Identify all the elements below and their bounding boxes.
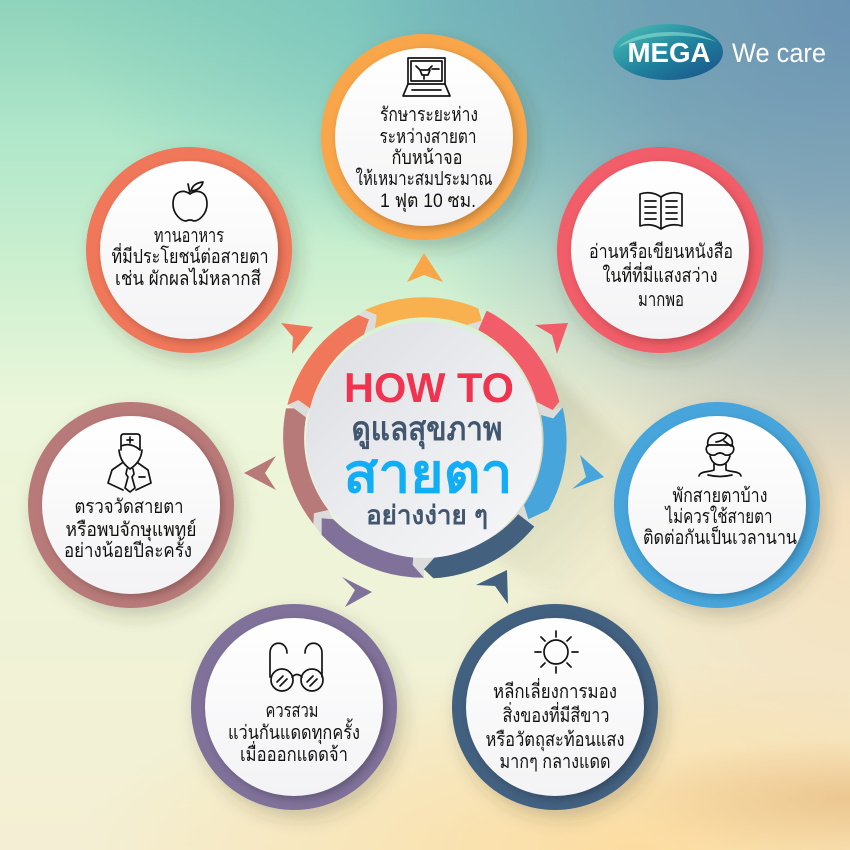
panel: reading light: มากพอ bbox=[638, 289, 684, 311]
central ring and title bbox=[283, 297, 567, 578]
panel: reading light bbox=[557, 147, 763, 353]
icon: glasses bbox=[270, 643, 323, 691]
icon: person with goggles bbox=[699, 433, 741, 476]
long shadow of central ring bbox=[490, 355, 630, 610]
panel: avoid glare: สิ่งของที่มีสีขาว bbox=[502, 702, 610, 727]
arrow: left bbox=[244, 456, 276, 490]
panel: screen distance: ให้เหมาะสมประมาณ bbox=[356, 167, 492, 190]
logo: MEGA We care bbox=[613, 24, 826, 80]
arrow: bottom right bbox=[476, 570, 508, 604]
panel: screen distance bbox=[321, 34, 527, 240]
arrow: bottom left bbox=[342, 577, 372, 607]
panel: screen distance: รักษาระยะห่าง bbox=[380, 104, 478, 126]
panel: rest eyes: ไม่ควรใช้สายตา bbox=[664, 505, 772, 528]
logo: MEGA We care: MEGA bbox=[628, 37, 710, 68]
panel: eye exam bbox=[28, 402, 234, 608]
logo: MEGA We care: We care bbox=[732, 38, 826, 68]
panel: reading light: ในที่ที่มีแสงสว่าง bbox=[602, 262, 718, 287]
panel: eye exam: ตรวจวัดสายตา bbox=[74, 496, 184, 518]
title text bbox=[344, 364, 514, 530]
central white disc bbox=[306, 322, 542, 558]
title text: ดูแลสุขภาพ bbox=[352, 410, 502, 450]
arrow: right bbox=[572, 455, 604, 489]
panel: rest eyes: ติดต่อกันเป็นเวลานาน bbox=[643, 525, 797, 549]
icon: sun bbox=[535, 631, 578, 673]
panel: healthy food: ที่มีประโยชน์ต่อสายตา bbox=[112, 243, 268, 268]
icon: apple bbox=[173, 182, 207, 221]
panel: screen distance: กับหน้าจอ bbox=[392, 147, 462, 169]
icon: open book bbox=[640, 193, 682, 229]
title text: HOW TO bbox=[344, 364, 514, 411]
arrow: top left bbox=[281, 323, 313, 354]
panel: avoid glare bbox=[452, 604, 658, 810]
panel: avoid glare: มากๆ กลางแดด bbox=[500, 751, 610, 773]
panel: screen distance: ระหว่างสายตา bbox=[380, 126, 476, 148]
panel: screen distance: 1 ฟุต 10 ซม. bbox=[380, 190, 476, 213]
panel: reading light: อ่านหรือเขียนหนังสือ bbox=[589, 241, 733, 263]
ring of arrow segments bbox=[283, 297, 567, 578]
panel: healthy food: เช่น ผักผลไม้หลากสี bbox=[115, 267, 261, 290]
arrow: top right bbox=[535, 323, 568, 354]
title text: สายตา bbox=[344, 444, 512, 504]
panel: avoid glare: หรือวัตถุสะท้อนแสง bbox=[486, 729, 624, 752]
title text: อย่างง่าย ๆ bbox=[366, 500, 488, 530]
icon: laptop bbox=[403, 58, 450, 96]
panel: eye exam: อย่างน้อยปีละครั้ง bbox=[64, 536, 192, 562]
arrow: top bbox=[407, 253, 443, 282]
panel: healthy food bbox=[86, 147, 292, 353]
panel: sunglasses: ควรสวม bbox=[266, 700, 318, 722]
panel: healthy food: ทานอาหาร bbox=[154, 225, 224, 247]
panel: sunglasses: เมื่อออกแดดจ้า bbox=[240, 741, 348, 766]
panel: eye exam: หรือพบจักษุแพทย์ bbox=[66, 518, 196, 542]
icon: doctor bbox=[108, 434, 151, 492]
panel: avoid glare: หลีกเลี่ยงการมอง bbox=[493, 678, 617, 703]
panel: rest eyes bbox=[614, 402, 820, 608]
panel: sunglasses bbox=[191, 604, 397, 810]
panel: sunglasses: แว่นกันแดดทุกครั้ง bbox=[228, 718, 360, 745]
panel: rest eyes: พักสายตาบ้าง bbox=[672, 485, 768, 507]
